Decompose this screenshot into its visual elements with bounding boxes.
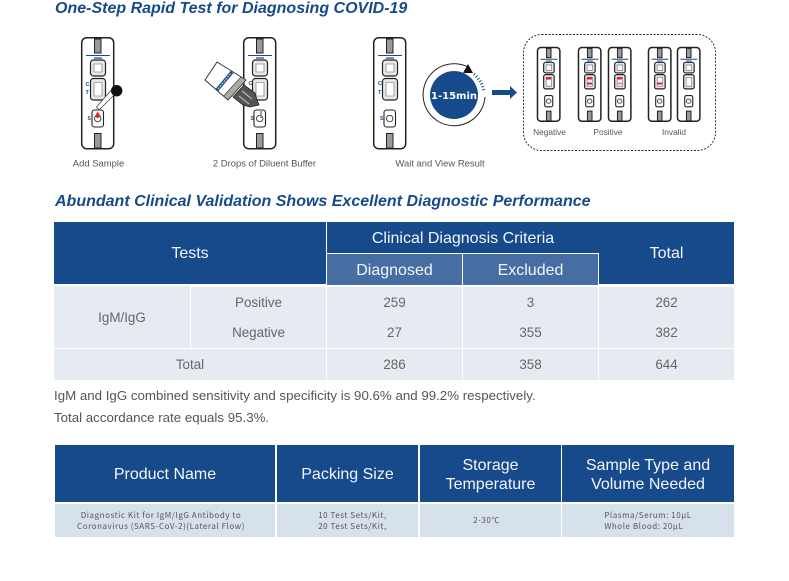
table: product information: Plasma/Serum: 10μL [604, 510, 692, 521]
table: clinical performance: Negative [232, 325, 285, 340]
step 1: add sample: C [86, 82, 90, 88]
step 2: diluent buffer [205, 38, 276, 149]
table: clinical performance: 644 [655, 357, 678, 372]
results panel: Negative [533, 127, 566, 137]
table: clinical performance: Positive [235, 295, 282, 310]
table: clinical performance: 382 [655, 325, 678, 340]
step 1: add sample: T [86, 90, 90, 96]
timer: 1-15 min [423, 64, 485, 126]
table: product information: Whole Blood: 20μL [604, 520, 683, 532]
table: clinical performance: 358 [519, 357, 542, 372]
table: product information: 2-30℃ [473, 515, 500, 526]
step captions: Add Sample [73, 158, 124, 170]
table: clinical performance: 27 [387, 325, 402, 340]
table: product information: Storage [462, 456, 519, 474]
results panel: Invalid [662, 127, 686, 137]
text: sensitivity and specificity summary: IgM and IgG combined sensitivity and specificity is 90.6% and 99.2% respectively. [54, 388, 536, 403]
text: sensitivity and specificity summary [54, 388, 536, 425]
table: product information: Product Name [114, 466, 216, 482]
table: clinical performance: Diagnosed [356, 262, 433, 278]
table: clinical performance: Tests [171, 245, 209, 262]
step 3: wait: C [378, 81, 382, 87]
step 1: add sample: S [88, 116, 92, 122]
table: clinical performance: 259 [383, 295, 406, 310]
step 3: wait [374, 38, 406, 149]
table: clinical performance: Excluded [498, 262, 563, 278]
table: product information: Packing Size [301, 466, 394, 482]
step 1: add sample [82, 38, 122, 149]
step 3: wait: T [378, 90, 382, 96]
results panel [524, 34, 716, 150]
heading: one-step rapid test: One-Step Rapid Test for Diagnosing COVID-19 [55, 0, 407, 17]
table: product information: Sample Type and [586, 456, 710, 474]
table: product information: Temperature [446, 476, 535, 492]
table: product information: Volume Needed [591, 476, 705, 492]
table: clinical performance: 262 [655, 295, 678, 310]
table: product information: Coronavirus (SARS-CoV-2)(Lateral Flow) [77, 520, 245, 532]
table: clinical performance: 3 [527, 295, 534, 310]
step 2: diluent buffer: C [248, 81, 252, 87]
text: sensitivity and specificity summary: Total accordance rate equals 95.3%. [54, 410, 269, 425]
step captions [73, 158, 485, 170]
step 3: wait: S [380, 116, 384, 122]
table: clinical performance: 286 [383, 357, 406, 372]
step captions: Wait and View Result [395, 158, 485, 170]
heading: clinical validation: Abundant Clinical Validation Shows Excellent Diagnostic Performance [55, 193, 591, 210]
result: negative [537, 47, 560, 121]
table: clinical performance: Clinical Diagnosis Criteria [372, 230, 554, 246]
table: clinical performance [54, 222, 734, 380]
step captions: 2 Drops of Diluent Buffer [213, 158, 316, 170]
result: invalid [648, 47, 700, 121]
result: positive [578, 47, 631, 121]
table: clinical performance: Total [650, 245, 683, 262]
table: product information: Diagnostic Kit for IgM/IgG Antibody to [81, 510, 241, 521]
table: clinical performance: 355 [519, 325, 542, 340]
step 2: diluent buffer: S [250, 116, 254, 122]
results panel: Positive [593, 127, 623, 137]
arrow to results [492, 86, 517, 99]
table: clinical performance: IgM/IgG [98, 310, 146, 324]
timer: 1-15 min: 1-15min [431, 91, 477, 102]
table: product information [55, 445, 734, 537]
table: product information: 20 Test Sets/Kit, [318, 520, 387, 532]
table: clinical performance: Total [176, 357, 204, 372]
procedure diagram [72, 34, 716, 170]
table: product information: 10 Test Sets/Kit, [318, 510, 387, 521]
